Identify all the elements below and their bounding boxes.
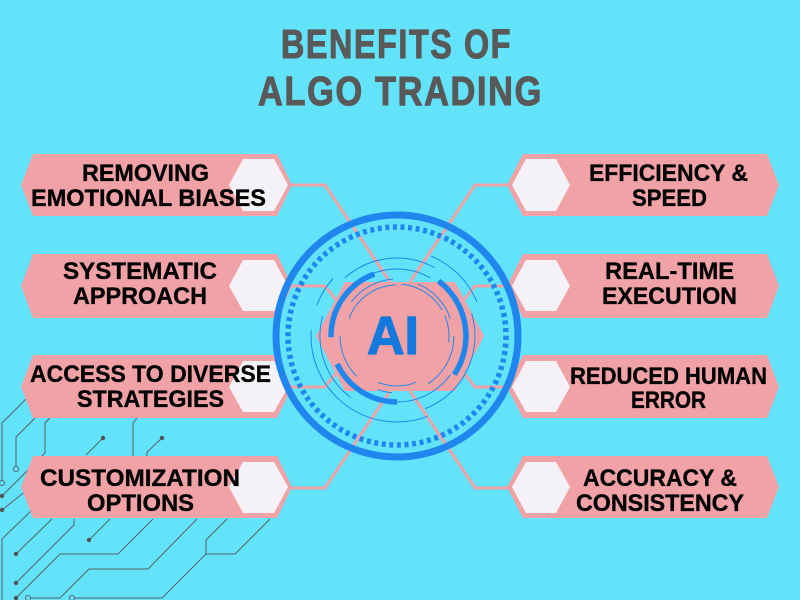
banner: customization options: OPTIONS — [87, 490, 194, 517]
banner: accuracy and consistency: ACCURACY & — [583, 465, 737, 492]
connector lines — [290, 185, 510, 488]
AI label: AI — [367, 306, 419, 366]
banner: removing emotional biases: REMOVING — [82, 160, 209, 187]
center hexagon — [316, 282, 484, 391]
banner: customization options: CUSTOMIZATION — [40, 465, 240, 492]
banner: efficiency and speed: EFFICIENCY & — [589, 160, 748, 187]
banner: real-time execution — [507, 254, 779, 318]
banner: reduced human error: REDUCED HUMAN — [570, 363, 767, 390]
banner: accuracy and consistency — [507, 456, 779, 518]
banner: access to diverse strategies — [21, 355, 292, 418]
banner: removing emotional biases — [21, 154, 292, 216]
banner: removing emotional biases: EMOTIONAL BIASES — [31, 185, 266, 212]
banner: systematic approach: APPROACH — [73, 283, 207, 310]
banner: systematic approach: SYSTEMATIC — [63, 258, 217, 285]
title: BENEFITS OF — [281, 21, 512, 67]
banner: accuracy and consistency: CONSISTENCY — [576, 490, 744, 517]
banner: customization options — [21, 456, 292, 518]
outer ring — [276, 215, 518, 457]
thin arcs — [283, 222, 511, 450]
circuit board decoration — [0, 399, 270, 600]
banner: reduced human error — [507, 355, 779, 418]
dotted ring — [288, 227, 506, 445]
thick arcs — [300, 239, 494, 433]
banner: systematic approach — [21, 254, 292, 318]
banner: real-time execution: REAL-TIME — [605, 258, 734, 285]
banner: efficiency and speed: SPEED — [632, 185, 707, 212]
banner: access to diverse strategies: ACCESS TO DIVERSE — [30, 361, 271, 388]
title: ALGO TRADING — [258, 68, 543, 114]
banner: reduced human error: ERROR — [631, 387, 706, 414]
banner: real-time execution: EXECUTION — [602, 283, 737, 310]
central AI emblem — [276, 215, 518, 457]
banner: access to diverse strategies: STRATEGIES — [77, 386, 224, 413]
banner: efficiency and speed — [507, 154, 779, 216]
title — [258, 21, 543, 114]
